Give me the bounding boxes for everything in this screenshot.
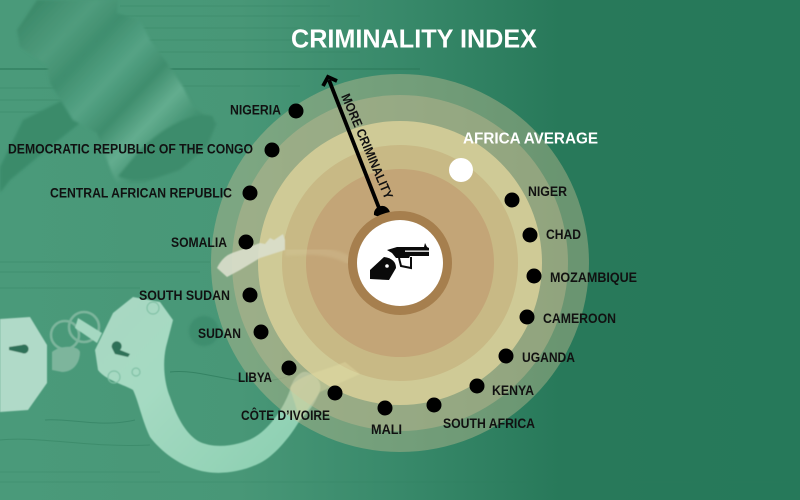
country: Cameroon: CAMEROON: [543, 311, 616, 326]
africa average marker: [449, 130, 598, 182]
chain link bar: [75, 318, 102, 343]
country: Kenya: KENYA: [492, 383, 534, 398]
country: Mali: [371, 400, 402, 437]
cuff rivets: [108, 302, 159, 383]
right cuff: [95, 297, 320, 473]
country: Cote d'Ivoire: [241, 386, 342, 423]
gavel head: [17, 0, 217, 183]
knot in wood: [189, 316, 219, 346]
lower chain link: [52, 347, 80, 372]
photo: handcuffs: [0, 297, 320, 473]
country: Cameroon: [520, 310, 616, 326]
gavel end face: [118, 115, 214, 180]
country: Mozambique: [526, 268, 637, 285]
country: Somalia: SOMALIA: [171, 235, 227, 250]
country: Sudan: [198, 324, 268, 341]
country: Libya: LIBYA: [238, 370, 272, 385]
africa average label: AFRICA AVERAGE: [463, 130, 598, 148]
country: CAR: CENTRAL AFRICAN REPUBLIC: [50, 186, 232, 200]
ring 4: [282, 145, 518, 381]
country: South Sudan: SOUTH SUDAN: [139, 288, 230, 303]
country: Sudan: SUDAN: [198, 326, 241, 341]
country: Nigeria: NIGERIA: [230, 102, 281, 118]
left cuff plate: [0, 317, 47, 412]
arrow: more criminality: [323, 77, 396, 218]
country: Kenya: [470, 378, 534, 398]
country: Uganda: UGANDA: [522, 350, 575, 365]
icon: revolver: [370, 243, 429, 280]
country: Cote d'Ivoire: CÔTE D’IVOIRE: [241, 408, 330, 423]
country: Mozambique: MOZAMBIQUE: [550, 270, 637, 285]
country: DRC: DEMOCRATIC REPUBLIC OF THE CONGO: [8, 142, 253, 156]
cuff tip glow over ring 3: [290, 362, 360, 420]
center badge: [348, 211, 452, 315]
arrow label: MORE CRIMINALITY: [338, 91, 396, 201]
country: South Africa: SOUTH AFRICA: [443, 416, 535, 431]
title: CRIMINALITY INDEX: [291, 24, 538, 54]
gavel handle: [0, 100, 80, 193]
ring 3: [258, 121, 542, 405]
country: Chad: [522, 227, 581, 242]
country: Chad: CHAD: [546, 227, 581, 242]
country: Mali: MALI: [371, 422, 402, 437]
ring 2: [232, 95, 568, 431]
ring 5: [306, 169, 494, 357]
country: Uganda: [498, 348, 575, 365]
country: Libya: [238, 360, 296, 385]
photo overlay: pale cuff showing through rings: [217, 234, 285, 277]
country: South Africa: [426, 398, 535, 431]
country: Niger: [504, 184, 567, 208]
concentric rings: [211, 74, 589, 452]
photo: gavel: [0, 0, 217, 193]
country: Niger: NIGER: [528, 184, 567, 199]
ring 1 outermost: [211, 74, 589, 452]
chain rings: [51, 312, 99, 349]
right keyhole: [112, 341, 130, 357]
left keyhole: [9, 344, 29, 354]
faint band across inner rings: [285, 251, 352, 262]
